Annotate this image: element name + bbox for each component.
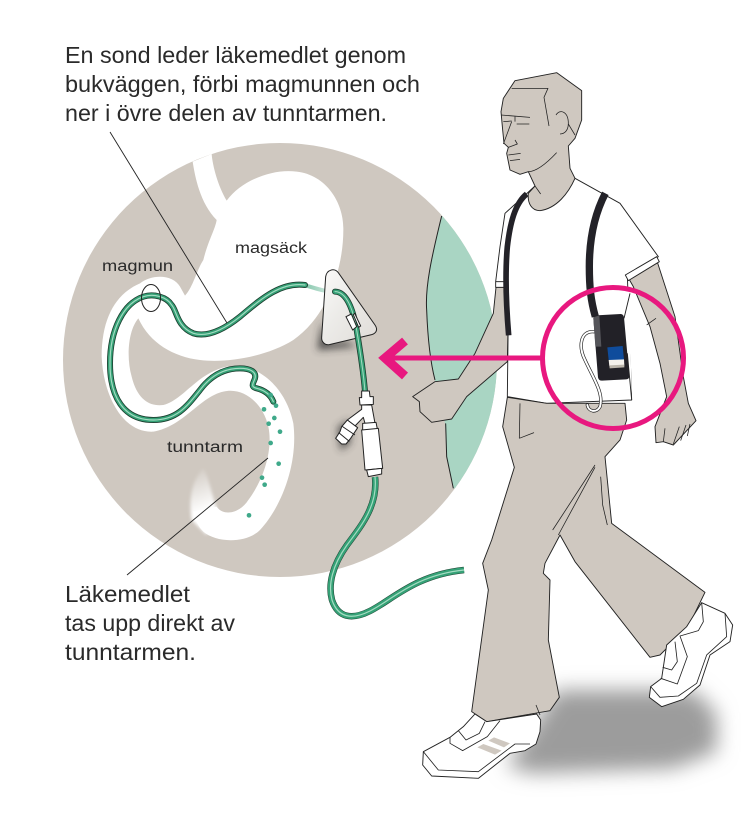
pink magnifier ring bbox=[542, 288, 684, 428]
text: top caption bbox=[65, 42, 420, 126]
near arm bbox=[627, 260, 696, 445]
pump display bbox=[607, 346, 624, 360]
text: bottom caption: tunntarmen. bbox=[65, 639, 196, 665]
shoulder strap left bbox=[506, 194, 527, 335]
pink arrow bbox=[385, 341, 541, 376]
pump device bbox=[593, 314, 629, 381]
text: top caption: En sond leder läkemedlet genom bbox=[65, 42, 406, 68]
text: bottom caption bbox=[65, 581, 235, 665]
external tube with connectors bbox=[335, 292, 383, 477]
shirt bbox=[496, 178, 658, 403]
leader line: probe bbox=[110, 132, 227, 323]
text: bottom caption: Läkemedlet bbox=[65, 581, 191, 607]
text: top caption: ner i övre delen av tunntarmen. bbox=[65, 100, 387, 126]
text: bottom caption: tas upp direkt av bbox=[65, 610, 235, 636]
shadow of connector bbox=[337, 419, 351, 451]
circle background bbox=[63, 143, 497, 577]
medicine dots bbox=[247, 393, 282, 518]
Y connector bbox=[336, 391, 383, 477]
ground shadow bbox=[507, 690, 717, 773]
back shoe bbox=[649, 603, 733, 707]
panel: abdomen circle bbox=[63, 143, 497, 577]
label: tunntarm: tunntarm bbox=[167, 439, 243, 456]
shirt sleeve band bbox=[625, 257, 659, 281]
head and neck bbox=[501, 73, 582, 211]
shirt body edge over arm bbox=[600, 287, 632, 399]
tube inside body bbox=[110, 285, 335, 420]
upper tube bbox=[335, 292, 365, 392]
pants and legs bbox=[472, 397, 705, 722]
shoulder strap right bbox=[589, 193, 605, 317]
tube cable bbox=[581, 332, 601, 411]
tube clip bbox=[346, 313, 361, 330]
label: magsäck: magsäck bbox=[235, 240, 307, 257]
far arm bbox=[413, 287, 508, 422]
front shoe bbox=[423, 714, 541, 778]
lower tube bbox=[331, 477, 464, 616]
label: magmun: magmun bbox=[102, 258, 173, 275]
shoe stripes bbox=[477, 737, 510, 755]
leader line: absorption bbox=[127, 458, 268, 575]
person bbox=[413, 73, 733, 778]
body side green area bbox=[426, 216, 497, 488]
text: top caption: bukväggen, förbi magmunnen och bbox=[65, 71, 420, 97]
adhesive pad bbox=[317, 270, 377, 350]
pylorus ring marker bbox=[142, 284, 160, 312]
stomach and intestine bbox=[102, 154, 343, 540]
